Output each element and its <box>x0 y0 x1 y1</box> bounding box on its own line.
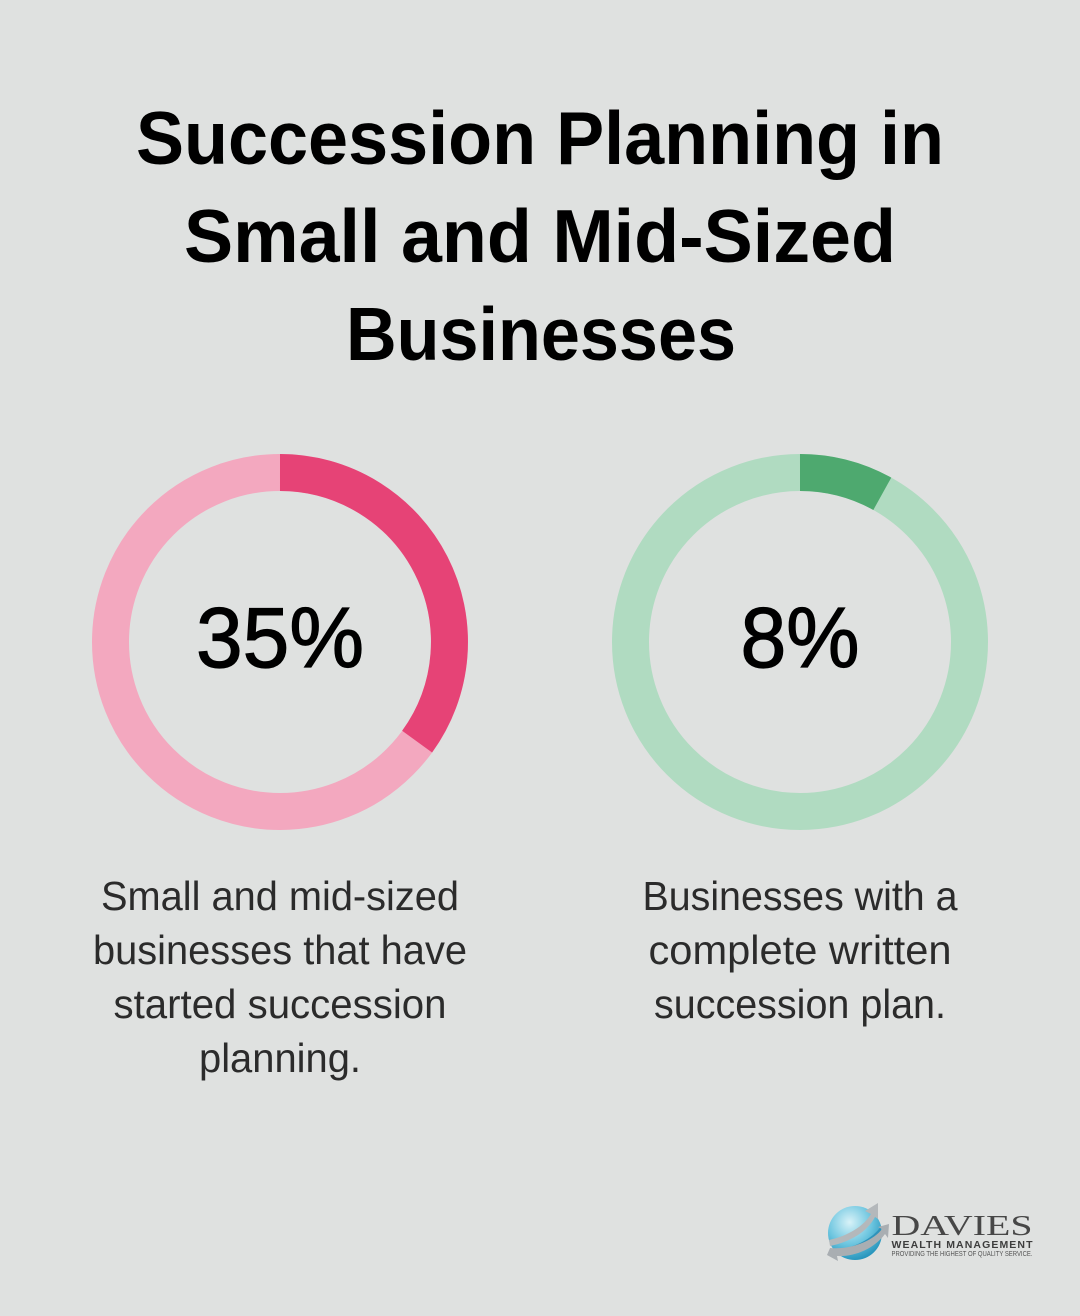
description: 35%: planning. <box>199 1035 361 1081</box>
panel: 8% statistic <box>630 472 970 1027</box>
description: 35%: started succession <box>114 981 446 1027</box>
value: 35%: 35% <box>196 591 364 686</box>
description: 35%: businesses that have <box>93 927 467 973</box>
icon: globe with arrows <box>827 1203 889 1261</box>
description: 35% <box>93 873 467 1081</box>
description: 8%: Businesses with a <box>642 873 958 919</box>
title <box>136 96 944 376</box>
logo wordmark: DAVIES <box>892 1210 1032 1242</box>
donut chart: 8% <box>630 472 970 812</box>
logo: Davies Wealth Management <box>827 1203 1033 1261</box>
title: Succession Planning in <box>136 96 944 180</box>
description: 8% <box>642 873 958 1027</box>
logo tagline: PROVIDING THE HIGHEST OF QUALITY SERVICE. <box>892 1251 1033 1258</box>
title: Small and Mid-Sized <box>184 194 896 278</box>
donut chart: 35% <box>110 472 450 812</box>
value: 8%: 8% <box>740 591 860 686</box>
panel: 35% statistic <box>93 472 467 1081</box>
description: 8%: succession plan. <box>654 981 946 1027</box>
logo subtitle: WEALTH MANAGEMENT <box>892 1239 1033 1251</box>
title: Businesses <box>346 292 736 376</box>
description: 35%: Small and mid-sized <box>101 873 459 919</box>
description: 8%: complete written <box>648 927 952 973</box>
